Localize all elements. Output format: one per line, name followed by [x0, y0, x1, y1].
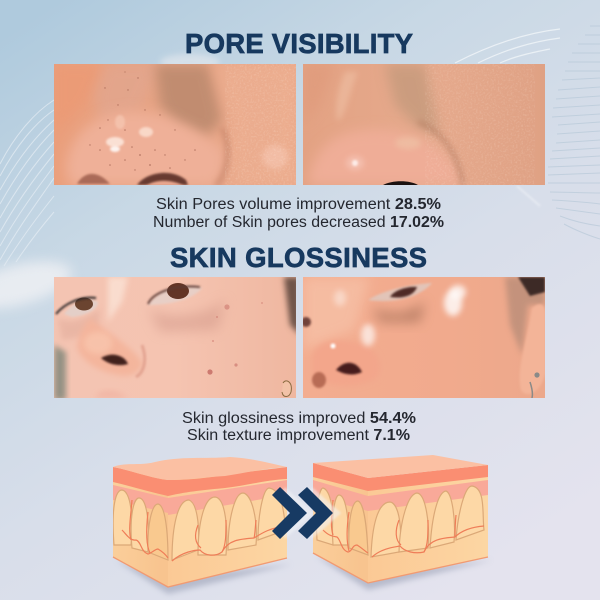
title: pore visibility: PORE VISIBILITY [185, 28, 413, 59]
photo: glossiness before [54, 277, 300, 400]
photo: glossiness after [301, 277, 546, 398]
illustration: skin after [313, 455, 492, 590]
caption: glossiness results: Skin glossiness improved 54.4% [182, 410, 416, 427]
illustration: skin before [113, 457, 292, 594]
photo: pores before [54, 64, 296, 186]
title: skin glossiness: SKIN GLOSSINESS [170, 242, 427, 273]
arrows: double chevron [272, 487, 336, 539]
wrinkled surface [113, 467, 287, 496]
caption: glossiness results: Skin texture improvement 7.1% [187, 427, 410, 444]
photo: pores after [303, 64, 545, 185]
caption: pore results: Number of Skin pores decreased 17.02% [153, 214, 444, 231]
caption: pore results: Skin Pores volume improvement 28.5% [156, 196, 441, 213]
caption: glossiness results [182, 410, 416, 444]
caption: pore results [153, 196, 444, 231]
